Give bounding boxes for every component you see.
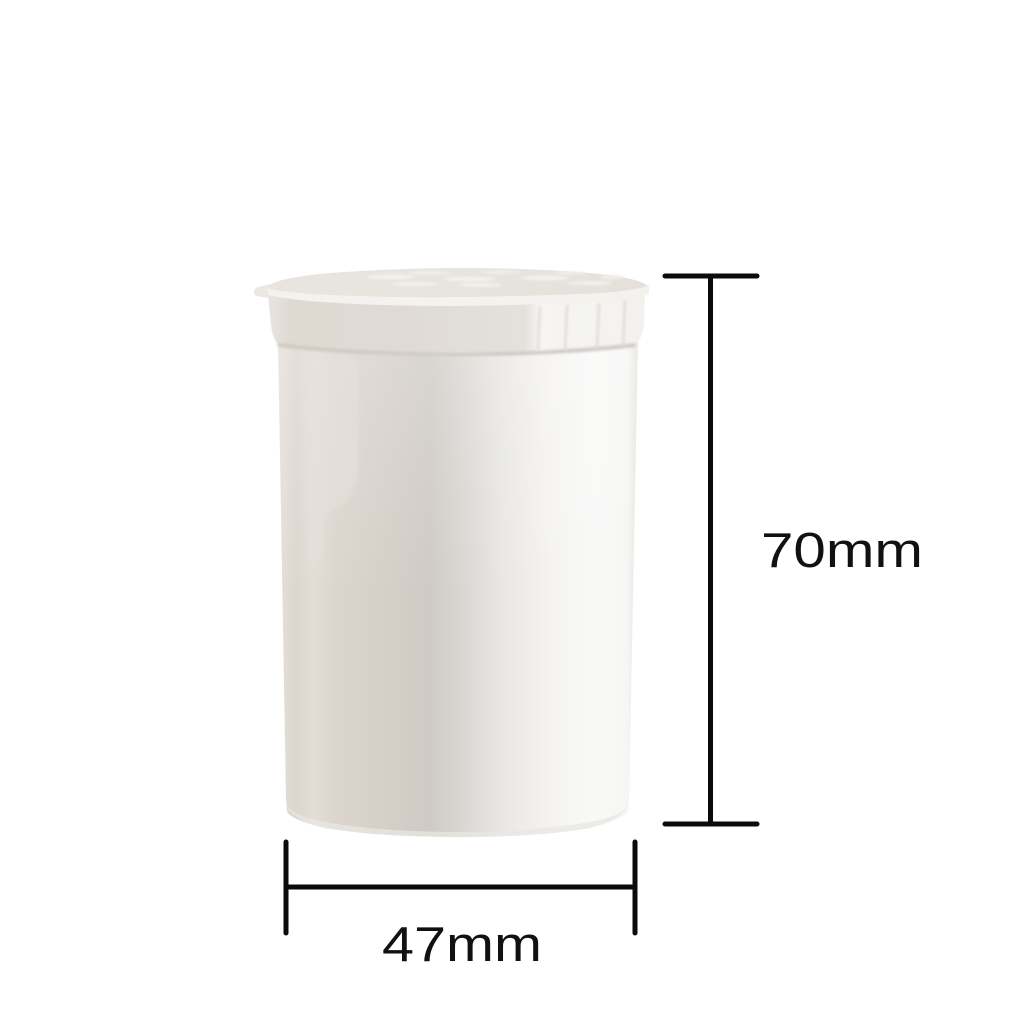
body reflection highlight: [305, 351, 358, 560]
width dimension bracket: [286, 842, 635, 933]
height label: 70mm: [761, 524, 923, 578]
width label: 47mm: [382, 918, 542, 972]
collar ring: [268, 296, 645, 356]
height dimension bracket: [665, 276, 757, 824]
base rim: [287, 806, 628, 837]
collar ribs: [538, 300, 625, 351]
lid rim: [267, 285, 649, 306]
embossed lid pattern: [366, 270, 624, 287]
lid: [254, 268, 649, 306]
container: white pop-top vial: [254, 268, 649, 837]
container body: [278, 340, 638, 837]
lid tab: [254, 284, 272, 298]
